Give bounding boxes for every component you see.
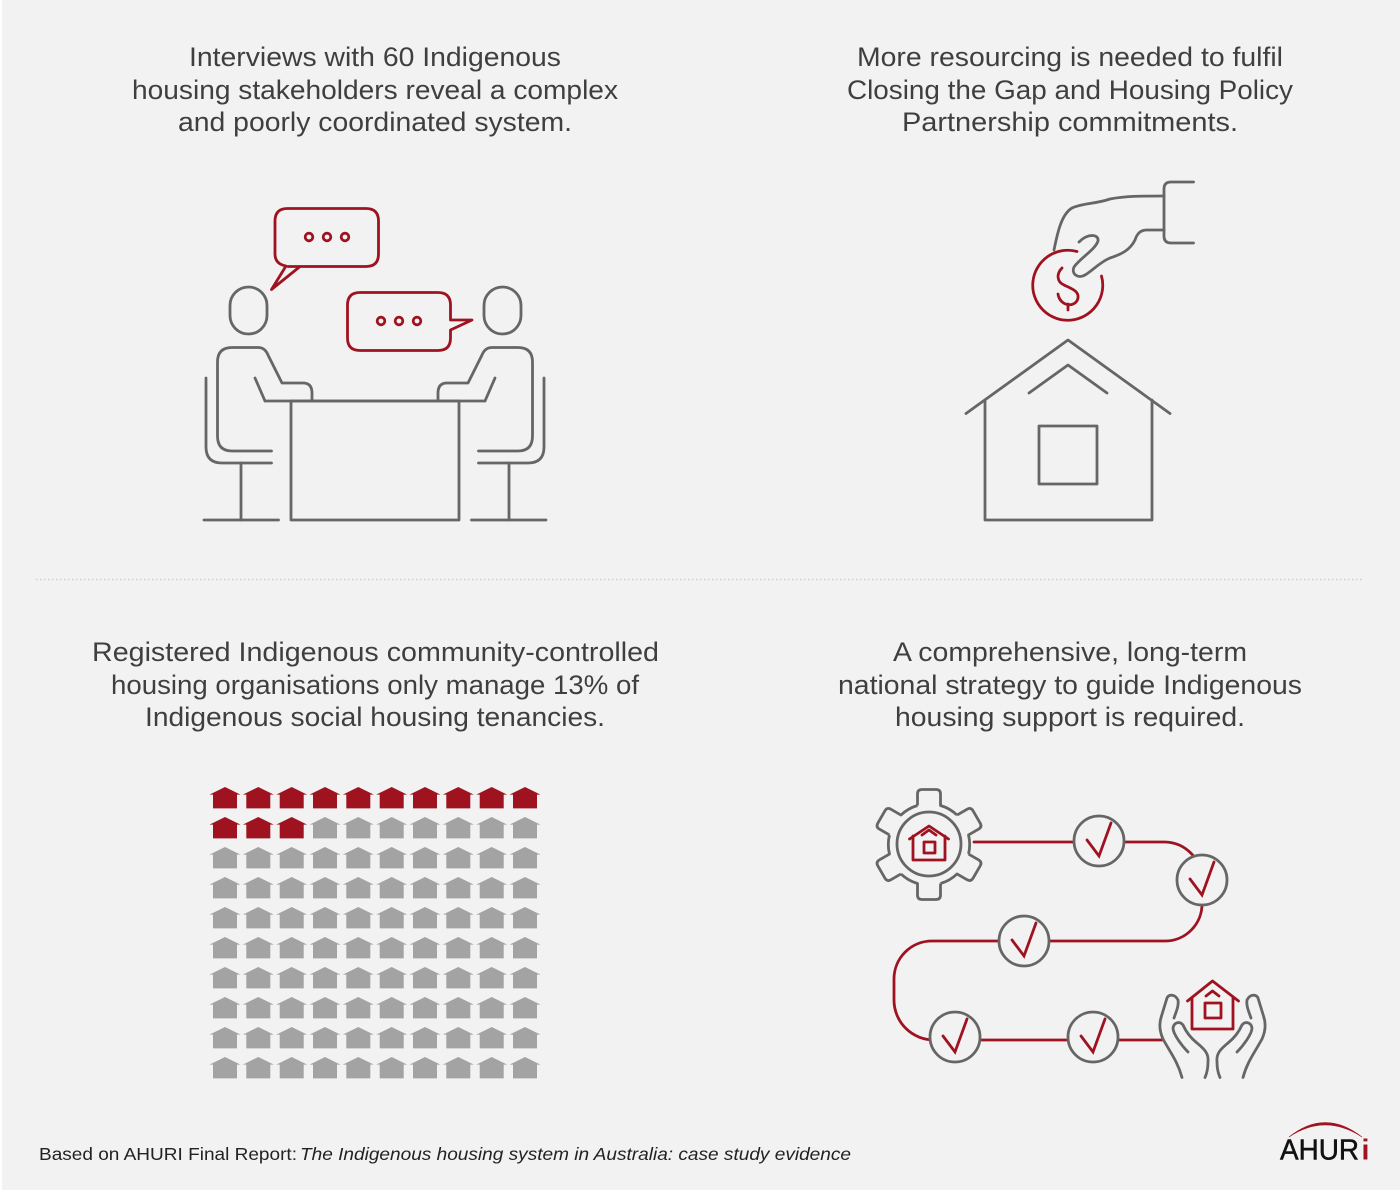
heading: resourcing: More resourcing is needed to fulfil	[857, 42, 1283, 72]
heading: interviews	[132, 42, 619, 137]
speech bubble: right person	[348, 292, 472, 350]
checkpoint 4	[930, 1012, 980, 1062]
icon: pathway from gear to protected house	[867, 790, 1265, 1078]
icon: hand dropping coin onto house	[966, 182, 1194, 520]
icon: gear with house	[867, 790, 991, 900]
checkpoint 3	[999, 916, 1049, 966]
remaining houses: 87	[210, 817, 540, 1078]
heading: resourcing: Closing the Gap and Housing Policy	[847, 75, 1294, 105]
footer source note: The Indigenous housing system in Australia: case study evidence	[300, 1144, 851, 1164]
speech bubble: left person	[272, 208, 378, 290]
checkpoint 5	[1068, 1012, 1118, 1062]
chart: 100 house pictogram, 13 highlighted	[210, 787, 540, 1078]
heading: national strategy: housing support is required.	[895, 702, 1245, 732]
right person and chair	[438, 287, 546, 520]
panel: interviews	[132, 42, 619, 520]
heading: national strategy	[838, 637, 1302, 732]
divider	[36, 578, 1364, 580]
heading: community-controlled share: Registered Indigenous community-controlled	[92, 637, 659, 667]
footer source note	[39, 1144, 851, 1164]
heading: resourcing: Partnership commitments.	[902, 107, 1238, 137]
icon: two people talking at a table	[204, 208, 546, 520]
heading: community-controlled share	[92, 637, 659, 732]
heading: interviews: Interviews with 60 Indigenous	[189, 42, 561, 72]
heading: national strategy: national strategy to guide Indigenous	[838, 670, 1302, 700]
icon: hands holding house	[1160, 981, 1265, 1078]
logo: AHURI: i	[1362, 1134, 1369, 1166]
highlighted houses: 13	[210, 787, 540, 838]
checkpoint 1	[1074, 816, 1124, 866]
heading: community-controlled share: Indigenous social housing tenancies.	[145, 702, 605, 732]
panel: resourcing	[847, 42, 1294, 520]
left person and chair	[204, 287, 312, 520]
logo: AHURI	[1280, 1122, 1369, 1166]
heading: community-controlled share: housing organisations only manage 13% of	[111, 670, 639, 700]
house	[966, 340, 1170, 520]
panel: community-controlled share	[92, 637, 659, 1078]
coin with dollar sign	[1033, 250, 1103, 320]
heading: national strategy: A comprehensive, long-term	[893, 637, 1247, 667]
pathway line	[894, 842, 1202, 1040]
hand and cuff	[1054, 182, 1194, 276]
footer source note: Based on AHURI Final Report:	[39, 1144, 297, 1164]
heading: interviews: housing stakeholders reveal a complex	[132, 75, 619, 105]
logo: AHURI: AHUR	[1280, 1134, 1359, 1166]
table	[265, 401, 485, 520]
heading: resourcing	[847, 42, 1294, 137]
heading: interviews: and poorly coordinated system.	[178, 107, 572, 137]
panel: national strategy	[838, 637, 1302, 1078]
checkpoint 2	[1177, 855, 1227, 905]
